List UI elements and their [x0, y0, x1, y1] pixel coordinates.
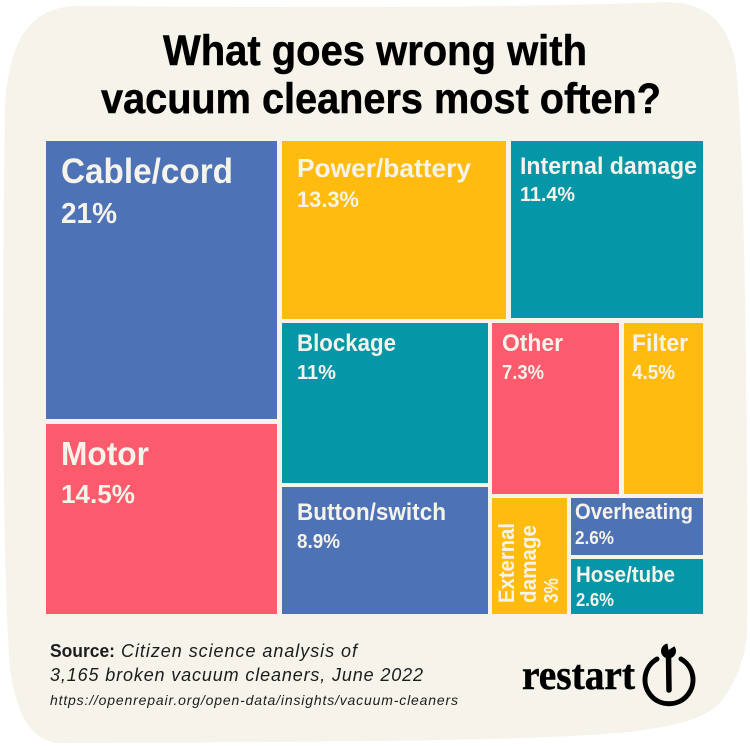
- panel: internal damage: Internal damage: [520, 153, 697, 180]
- panel: external damage: [492, 498, 567, 614]
- panel: power/battery: 13.3%: [297, 187, 359, 212]
- source note: [50, 641, 458, 708]
- panel: filter: 4.5%: [632, 362, 675, 384]
- source note: https://openrepair.org/open-data/insights/vacuum-cleaners: [50, 692, 458, 708]
- panel: cable/cord: [46, 141, 277, 419]
- title: vacuum cleaners most often?: [101, 75, 661, 123]
- panel: button/switch: [282, 487, 488, 614]
- panel: hose/tube: Hose/tube: [576, 562, 675, 587]
- panel: button/switch: 8.9%: [297, 531, 340, 553]
- title: [101, 27, 661, 123]
- panel: cable/cord: 21%: [61, 198, 117, 230]
- panel: overheating: 2.6%: [575, 528, 614, 548]
- panel: cable/cord: Cable/cord: [61, 152, 233, 191]
- treemap chart: [46, 141, 703, 614]
- title: What goes wrong with: [163, 27, 587, 75]
- panel: overheating: Overheating: [575, 499, 693, 524]
- logo: restart: [522, 641, 693, 704]
- panel: power/battery: Power/battery: [297, 153, 472, 183]
- panel: blockage: [282, 323, 488, 483]
- source note: 3,165 broken vacuum cleaners, June 2022: [50, 665, 423, 685]
- panel: blockage: Blockage: [297, 330, 396, 357]
- panel: motor: [46, 424, 277, 614]
- logo: restart: restart: [522, 653, 635, 699]
- panel: filter: Filter: [632, 330, 688, 357]
- panel: external damage: 3%: [541, 578, 563, 603]
- panel: blockage: 11%: [297, 362, 336, 384]
- panel: internal damage: 11.4%: [520, 184, 575, 206]
- panel: motor: Motor: [61, 435, 149, 472]
- panel: other: Other: [502, 330, 563, 357]
- panel: other: [492, 323, 619, 494]
- panel: other: 7.3%: [502, 362, 544, 384]
- panel: overheating: [571, 498, 703, 555]
- panel: power/battery: [282, 141, 506, 319]
- source note: Source:: [50, 641, 115, 661]
- panel: hose/tube: [571, 559, 703, 614]
- panel: filter: [624, 323, 703, 494]
- icon: power symbol with wrench: [645, 641, 693, 704]
- panel: button/switch: Button/switch: [297, 499, 446, 526]
- panel: hose/tube: 2.6%: [576, 590, 614, 610]
- panel: external damage: damage: [516, 525, 541, 603]
- panel: internal damage: [511, 141, 703, 318]
- source note: Citizen science analysis of: [121, 641, 359, 661]
- panel: motor: 14.5%: [61, 479, 135, 509]
- panel: external damage: External: [494, 523, 519, 603]
